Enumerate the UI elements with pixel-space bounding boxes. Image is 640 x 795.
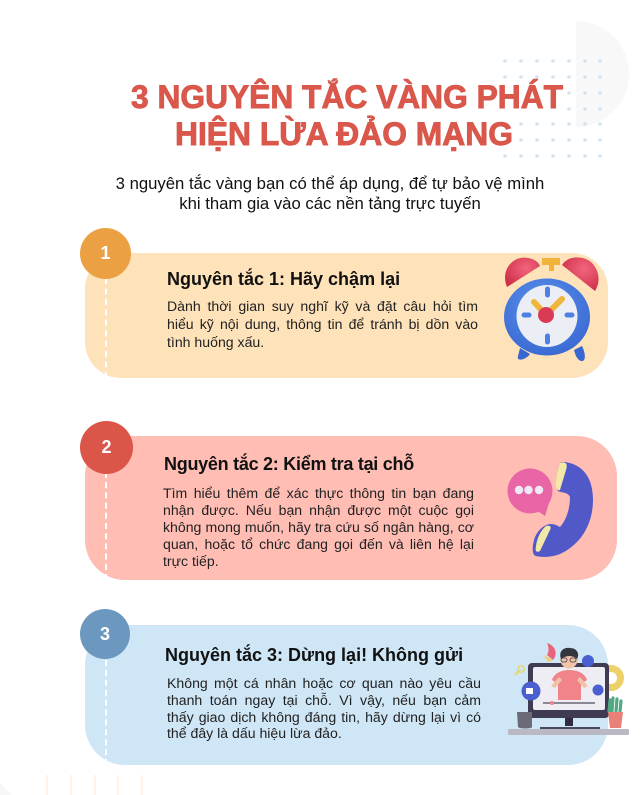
rule 1 text (167, 298, 478, 350)
panel: rule 3 (85, 625, 608, 765)
rule 1 heading: Nguyên tắc 1: Hãy chậm lại (167, 269, 400, 289)
rule 1 text: Dành thời gian suy nghĩ kỹ và đặt câu hỏi tìm (167, 298, 478, 314)
rule 2 number badge: 2 (101, 437, 112, 457)
rule 1 number badge: 1 (100, 243, 110, 263)
rule 1 text: tình huống xấu. (167, 334, 264, 350)
rule 1 dashed connector (105, 278, 107, 378)
subtitle: 3 nguyên tắc vàng bạn có thể áp dụng, để tự bảo vệ mình (116, 174, 544, 193)
subtitle (116, 174, 544, 213)
rule 1 number badge (80, 228, 131, 279)
rule 2 heading: Nguyên tắc 2: Kiểm tra tại chỗ (164, 454, 414, 474)
rule 2 text: trực tiếp. (163, 553, 219, 569)
rule 3 text: Không một cá nhân hoặc cơ quan nào yêu cầu (167, 675, 481, 691)
rule 2 dashed connector (105, 472, 107, 580)
rule 3 number badge (80, 609, 130, 659)
rule 3 number badge: 3 (100, 624, 110, 644)
rule 2 text: quan, hoặc tổ chức đang gọi đến và liên hệ lại (163, 536, 474, 552)
rule 2 text: không mong muốn, hãy tra cứu số ngân hàng, cơ (163, 519, 474, 535)
panel: rule 1 (85, 253, 608, 378)
rule 2 text (163, 485, 474, 569)
rule 3 dashed connector (105, 660, 107, 765)
rule 1 text: hiểu kỹ nội dung, thông tin để tránh bị dồn vào (167, 316, 478, 332)
subtitle: khi tham gia vào các nền tảng trực tuyến (179, 194, 481, 213)
rule 3 text: thanh toán ngay tại chỗ. Vì vậy, nếu bạn cảm (167, 692, 481, 708)
rule 3 text: thấy giao dịch không đáng tin, hãy dừng lại vì có (167, 709, 481, 725)
rule 2 number badge (80, 421, 133, 474)
rule 3 text: thể đây là dấu hiệu lừa đảo. (167, 725, 342, 741)
rule 3 heading: Nguyên tắc 3: Dừng lại! Không gửi (165, 645, 463, 665)
title (131, 78, 564, 152)
rule 2 text: nhận được. Nếu bạn nhận được một cuộc gọi (163, 502, 474, 518)
title: HIỆN LỪA ĐẢO MẠNG (175, 115, 513, 152)
rule 2 text: Tìm hiểu thêm để xác thực thông tin bạn đang (163, 485, 474, 501)
rule 3 text (167, 675, 481, 741)
panel: rule 2 (85, 436, 617, 580)
title: 3 NGUYÊN TẮC VÀNG PHÁT (131, 78, 563, 115)
